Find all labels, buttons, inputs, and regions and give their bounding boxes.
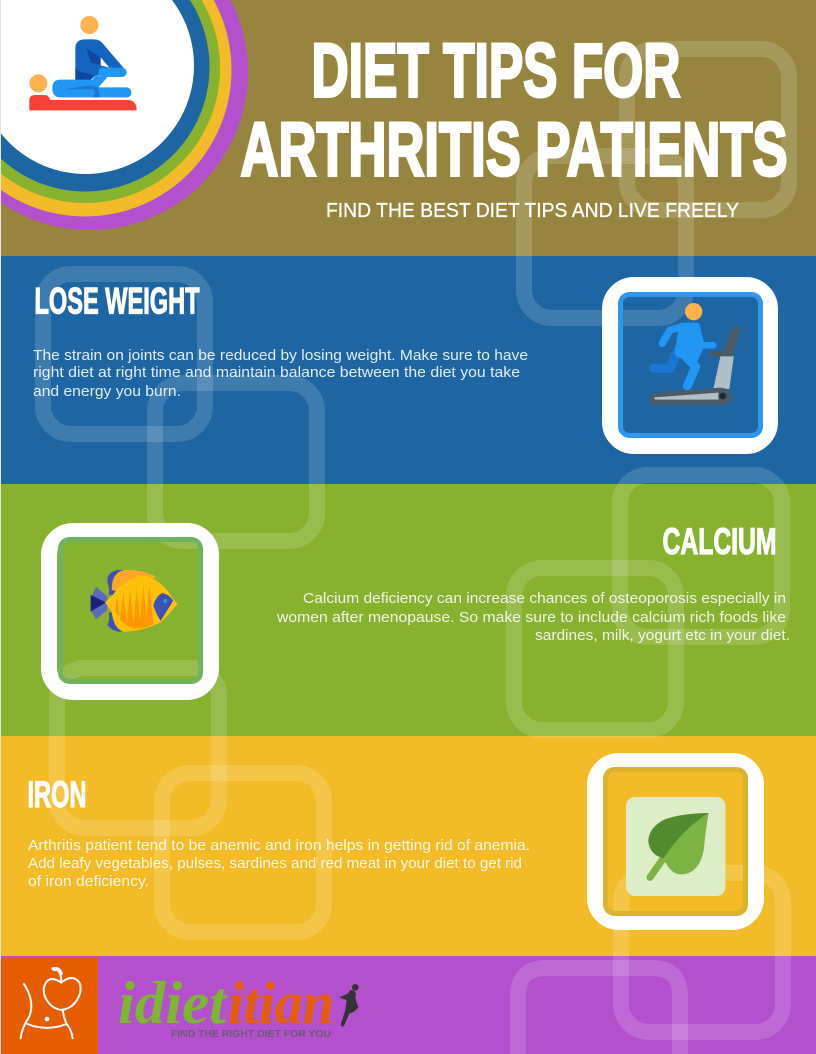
panel: lose weight: [33, 280, 770, 446]
logo: idietitian wordmark: idiet: [118, 970, 228, 1036]
band: calcium background: [1, 484, 816, 736]
band: lose weight background: [1, 256, 816, 484]
panel: calcium: [49, 521, 790, 692]
heading: lose weight: LOSE WEIGHT: [34, 280, 200, 322]
logo: idietitian wordmark: FIND THE RIGHT DIET FOR YOU: [171, 1028, 331, 1040]
panel: iron: [28, 761, 756, 922]
icon card: leaf: [595, 761, 756, 922]
band: header background: [1, 0, 816, 256]
text block: iron: Arthritis patient tend to be anemic and iron helps in getting rid of anemia.: [28, 838, 530, 854]
band: iron background: [1, 736, 816, 956]
text block: calcium: [276, 591, 790, 644]
rainbow circle emblem: [0, 0, 248, 230]
subtitle: FIND THE BEST DIET TIPS AND LIVE FREELY: [326, 200, 739, 222]
logo: idietitian wordmark: itian: [228, 970, 334, 1036]
text block: lose weight: and energy you burn.: [33, 384, 181, 400]
text block: lose weight: right diet at right time and maintain balance between the diet you take: [33, 365, 520, 381]
icon card: treadmill: [610, 285, 770, 446]
text block: calcium: sardines, milk, yogurt etc in your diet.: [535, 628, 790, 644]
icon: waist and apple: [21, 968, 81, 1038]
logo: idietitian wordmark: [118, 970, 334, 1040]
icon: massage therapist and patient: [29, 16, 137, 110]
heading: iron: IRON: [28, 774, 86, 815]
band: footer background: [1, 956, 816, 1054]
text block: iron: [28, 838, 530, 890]
text block: calcium: women after menopause. So make sure to include calcium rich foods like: [276, 610, 786, 626]
text block: iron: of iron deficiency.: [28, 874, 149, 890]
text block: lose weight: [33, 348, 528, 400]
text block: lose weight: The strain on joints can be reduced by losing weight. Make sure to have: [33, 348, 528, 364]
text block: iron: Add leafy vegetables, pulses, sardines and red meat in your diet to get rid: [28, 856, 522, 872]
icon: running woman silhouette: [339, 984, 359, 1026]
text block: calcium: Calcium deficiency can increase chances of osteoporosis especially in: [303, 591, 786, 607]
icon card: fish: [49, 531, 211, 692]
panel: footer: [1, 957, 359, 1054]
title: [240, 28, 788, 192]
logo box: orange: [1, 957, 98, 1054]
